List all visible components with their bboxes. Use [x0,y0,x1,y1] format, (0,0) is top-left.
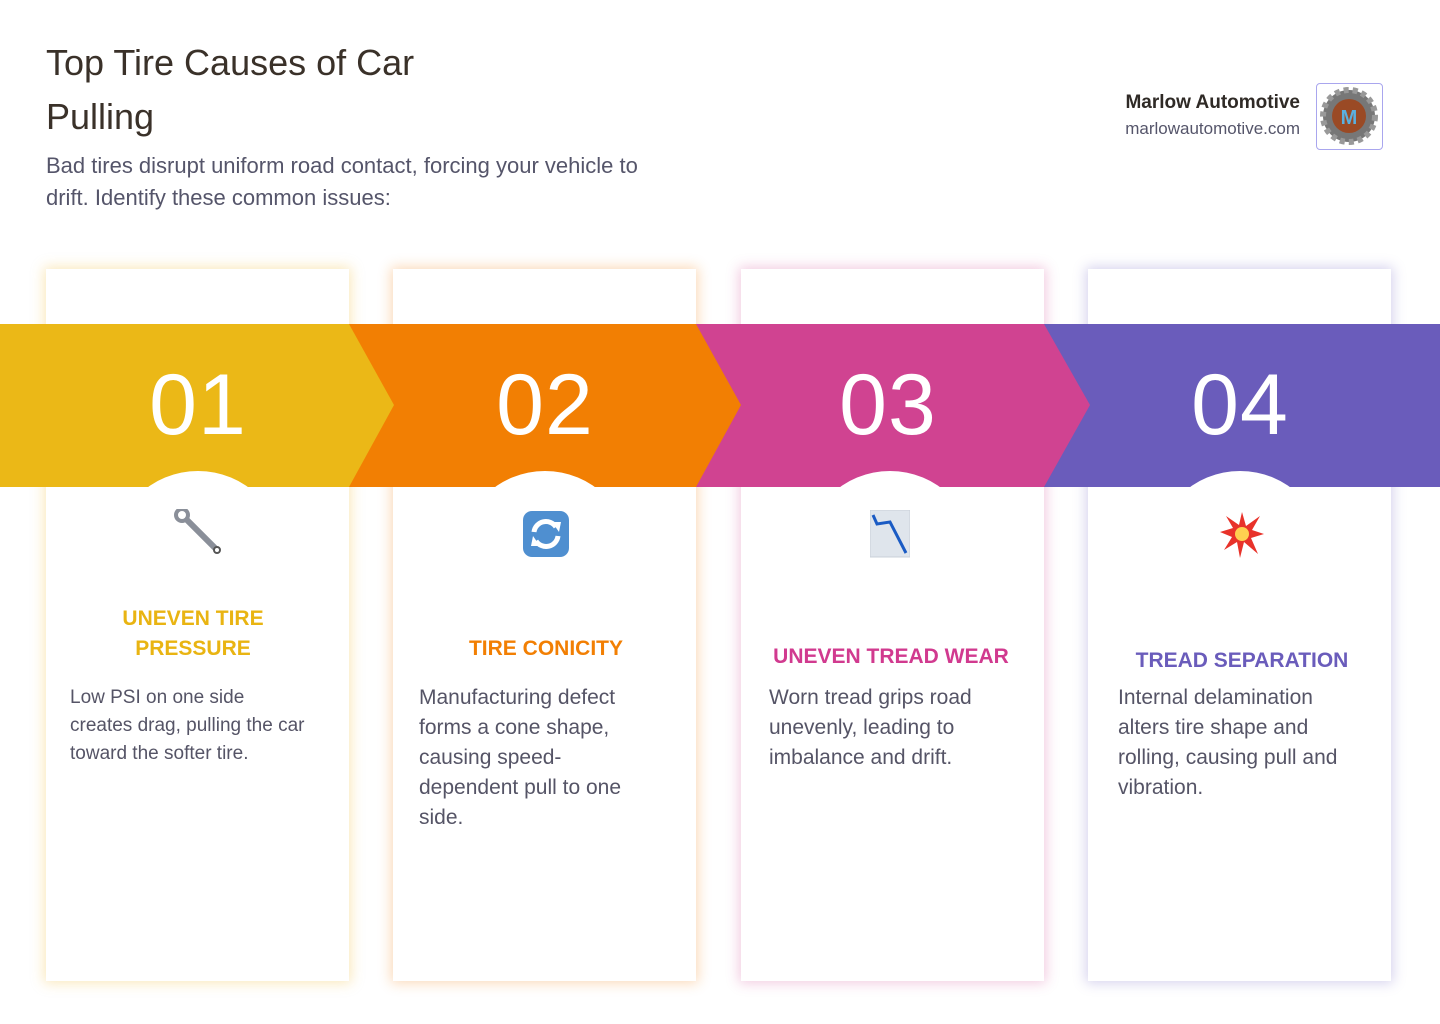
arrow band [0,324,1440,487]
card 3 text: Worn tread grips road unevenly, leading to imbalance and drift. [769,686,972,769]
card 1 [46,269,349,981]
title: Top Tire Causes of Car Pulling [46,42,414,137]
card 2 heading: TIRE CONICITY [469,637,623,660]
circle 2 [459,471,631,643]
card 4 [1088,269,1391,981]
card 2 text: Manufacturing defect forms a cone shape, causing speed-dependent pull to one side. [419,686,621,829]
circle 3 [804,471,976,643]
segment 1 [0,324,394,487]
card 4 text: Internal delamination alters tire shape and rolling, causing pull and vibration. [1118,686,1337,799]
number 03: 03 [839,357,937,453]
number 04: 04 [1191,357,1289,453]
brand url: marlowautomotive.com [1125,119,1300,138]
brand block [1125,83,1383,150]
circle 1 [112,471,284,643]
segment 2 [349,324,741,487]
circle 4 [1154,471,1326,643]
card 1 heading [122,607,264,660]
icon: wrench [174,509,221,554]
number 01: 01 [149,357,247,453]
icon: chart down [870,510,910,558]
card 1 heading: UNEVEN TIRE [122,607,264,630]
card 3 heading: UNEVEN TREAD WEAR [773,645,1009,668]
card 4 heading: TREAD SEPARATION [1136,649,1348,672]
icon: arrows cycle [523,511,569,557]
segment 4 [1044,324,1440,487]
logo: M [1341,107,1357,129]
card 1 text: Low PSI on one side [70,687,244,708]
card 3 [741,269,1044,981]
icon: collision [1220,512,1264,558]
subtitle: Bad tires disrupt uniform road contact, forcing your vehicle to drift. Identify these common issues: [46,153,638,210]
number 02: 02 [496,357,594,453]
brand name: Marlow Automotive [1125,92,1300,113]
card 1 text [70,687,304,764]
card 2 [393,269,696,981]
segment 3 [696,324,1090,487]
card 1 text: creates drag, pulling the car toward the softer tire. [70,715,304,764]
logo [1316,83,1383,150]
card 1 heading: PRESSURE [135,637,251,660]
